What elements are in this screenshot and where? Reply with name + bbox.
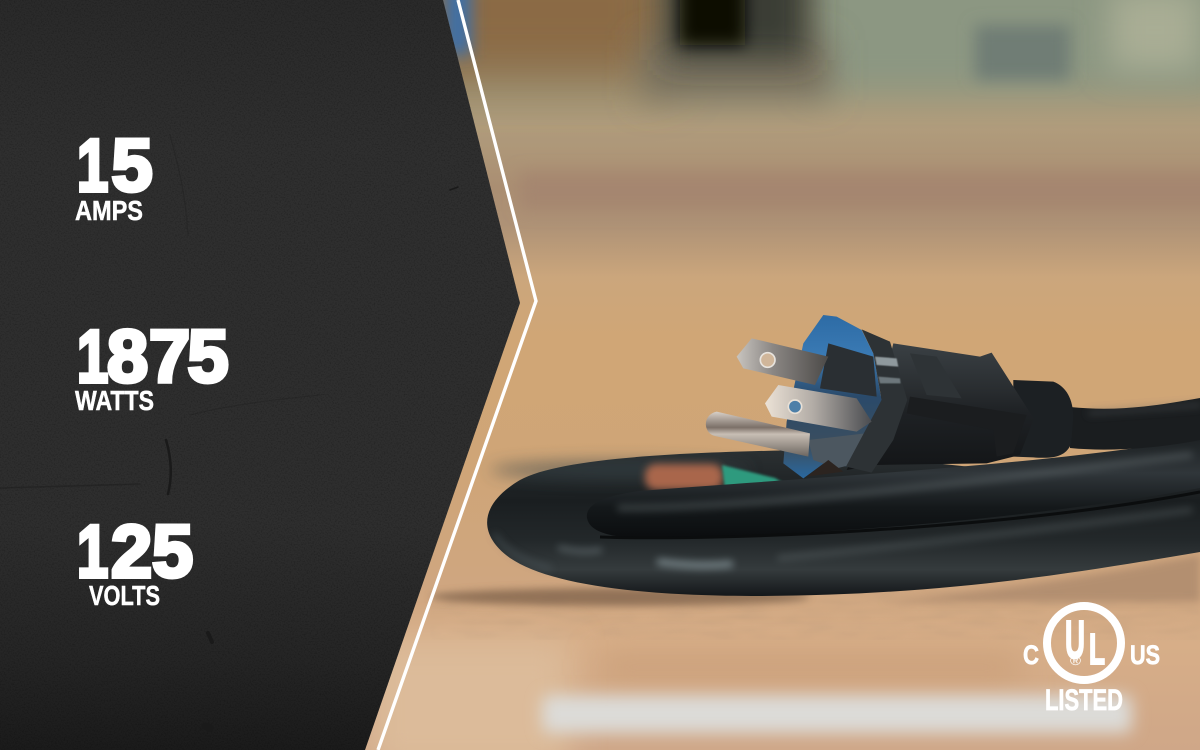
power cord [487,398,1200,596]
stat number: 1875: 8 [107,315,148,398]
stat label: AMPS: AMPS [75,195,143,226]
stat number: 1875: 7 [149,315,190,398]
stat: 125 volts [77,510,193,611]
cord: strand to plug [1070,398,1200,450]
stat number: 1875: 1 [77,316,108,398]
stat number: 125: 1 [77,511,108,593]
stat number: 125 [77,510,193,593]
dark chevron panel [0,0,525,750]
UL listed certification mark [1023,606,1160,717]
UL mark: C: C [1023,640,1039,670]
stat number: 15: 1 [77,125,108,207]
cord: highlights [495,405,1200,568]
table surface texture [430,555,1200,640]
cord: exposed copper wires [645,464,723,490]
UL mark: letter L: L [1089,625,1105,674]
plug: blue reflective face [783,315,882,478]
cord: outer loop [487,450,1200,596]
plug: top blade [737,338,828,385]
UL mark: letter U: U [1065,610,1085,670]
stat: 1875 watts [75,315,229,416]
panel: grunge texture [0,0,525,750]
plug: ground pin [706,412,810,457]
cord: gap between strands [600,492,1200,538]
stat: 15 amps [75,124,153,226]
UL mark: registered symbol: ® [1070,653,1081,668]
cord: upper strand [587,438,1200,538]
white chevron outline [378,0,536,750]
plug: body [847,343,1034,470]
UL mark: US: US [1130,640,1160,670]
stat label: VOLTS: VOLTS [89,580,160,611]
stat number: 1875: 5 [188,315,229,398]
plug: strain relief [1013,380,1073,458]
UL mark: LISTED: LISTED [1045,684,1123,717]
stat number: 125: 2 [111,510,152,593]
stat number: 1875 [77,315,229,398]
blurred white strip on table [542,695,1132,733]
stat number: 15: 5 [112,124,153,207]
stat number: 15 [77,124,153,207]
plug: middle blade [765,385,872,432]
power plug [706,315,1073,478]
stat label: WATTS: WATTS [75,385,154,416]
stat number: 125: 5 [152,510,193,593]
plug: collar [846,329,907,473]
cord: wire insulation green [722,465,785,491]
UL mark: ring [1047,606,1121,680]
